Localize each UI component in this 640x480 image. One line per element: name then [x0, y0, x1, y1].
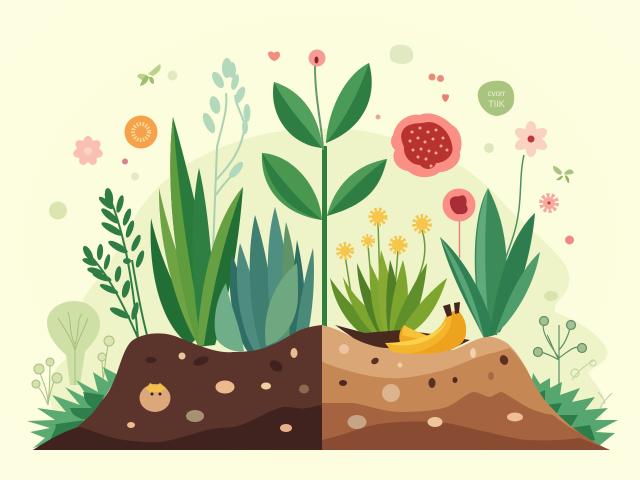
left agave — [151, 117, 243, 348]
text badge — [478, 81, 514, 116]
bush right — [530, 373, 618, 450]
seed plant right — [534, 316, 596, 385]
round seed creature — [140, 383, 170, 412]
text badge: TIIK — [488, 99, 505, 109]
leaf lower right — [327, 159, 387, 216]
right green plant — [440, 155, 540, 338]
thin flower stem — [505, 155, 524, 260]
text badge: cvorr — [488, 89, 506, 98]
red blossom large — [391, 113, 461, 177]
flower stems — [345, 222, 425, 300]
thin top stem — [315, 66, 323, 150]
yellow blossoms — [338, 210, 430, 258]
butterfly right — [553, 166, 574, 183]
central stem — [322, 146, 327, 330]
central tall plant — [262, 63, 387, 330]
left dark soil — [33, 325, 322, 450]
broad lower leaf — [215, 283, 244, 352]
broad pale leaf — [265, 263, 298, 346]
pink flower with red centre — [513, 121, 549, 157]
teal agave — [215, 207, 314, 352]
leaf upper left — [273, 82, 322, 148]
spiky leaves — [330, 278, 385, 342]
pale tree left — [47, 301, 100, 385]
leaf upper right — [326, 63, 372, 143]
right tan soil — [322, 325, 610, 450]
leaf lower left — [262, 153, 322, 220]
seed heads left — [32, 336, 114, 405]
bananas — [385, 302, 466, 354]
top pink flower — [308, 50, 326, 66]
pale blob right — [544, 291, 558, 301]
decorative dots and hearts — [49, 45, 574, 245]
red blossom small — [442, 188, 476, 258]
orange circle — [124, 116, 158, 148]
soil items right — [339, 344, 523, 429]
yellow flower plant — [330, 210, 447, 342]
fern left — [81, 187, 147, 338]
butterfly left — [137, 64, 161, 86]
small pink flower — [541, 195, 557, 211]
pale branching plant — [200, 58, 250, 250]
background hill — [49, 129, 607, 440]
pink flower left — [72, 136, 104, 167]
soil items left — [127, 348, 309, 432]
bush left — [27, 367, 118, 448]
